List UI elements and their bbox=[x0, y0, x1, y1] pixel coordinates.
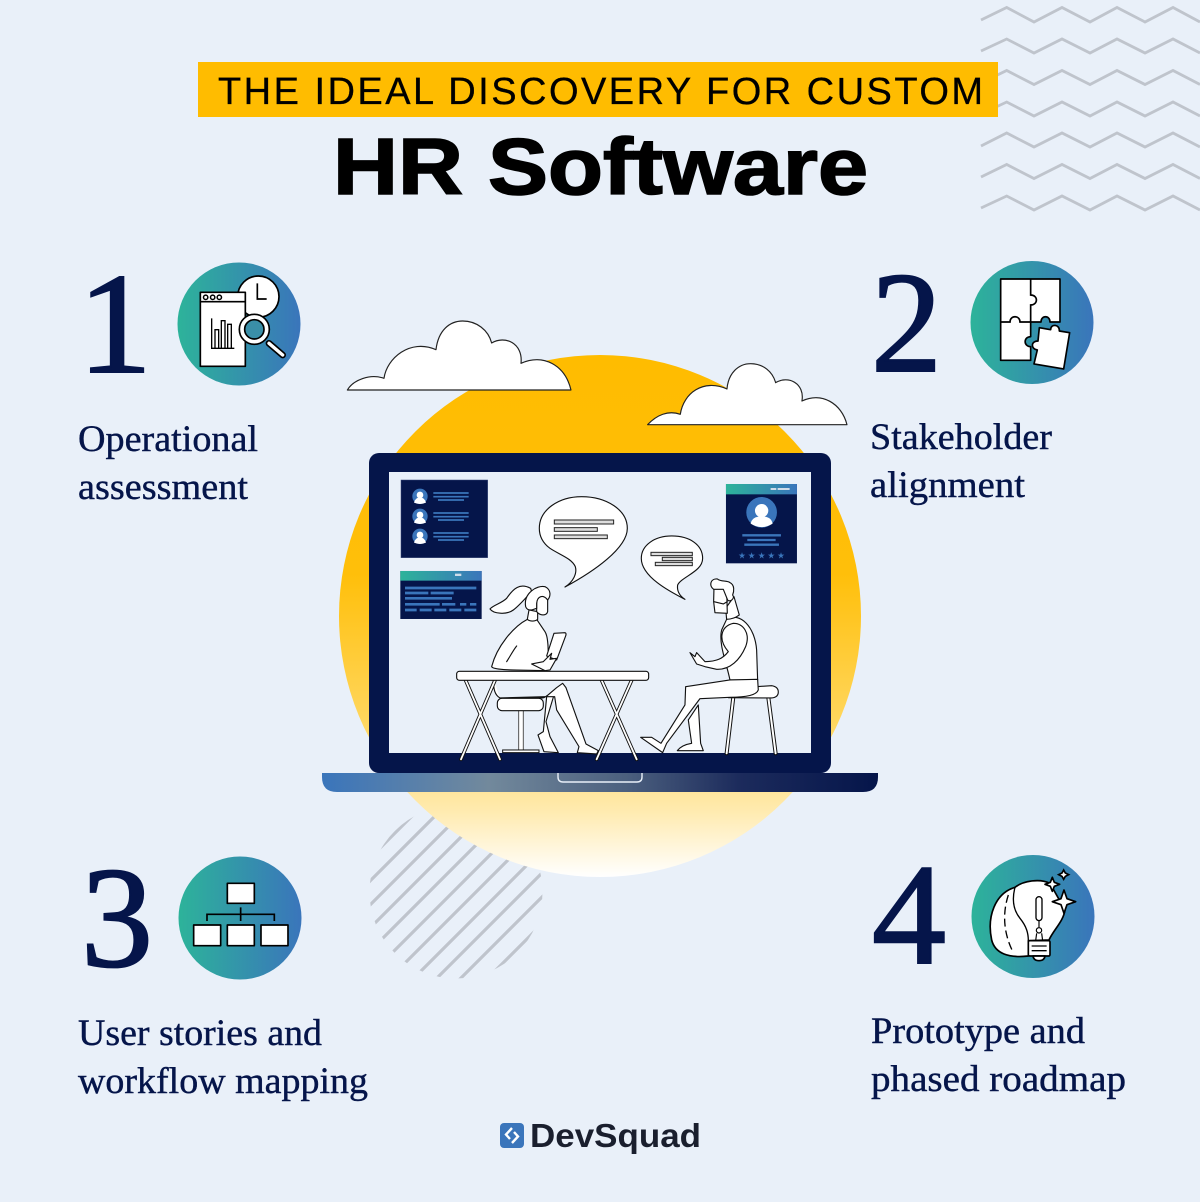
number 3: 3 bbox=[81, 839, 153, 998]
panel: profile card: ★ bbox=[738, 552, 746, 562]
yellow sun circle bbox=[339, 355, 861, 877]
number 2: 2 bbox=[871, 244, 942, 403]
number 1: 1 bbox=[78, 245, 152, 404]
label: Operational bbox=[78, 419, 258, 460]
panel: profile card: ★ bbox=[758, 552, 766, 562]
panel: profile card: ★ bbox=[748, 552, 756, 562]
figure: man bbox=[641, 579, 758, 753]
DevSquad logo bbox=[500, 1117, 701, 1154]
laptop bbox=[322, 453, 878, 792]
label bbox=[871, 1011, 1126, 1100]
icon: report and magnifier bbox=[178, 262, 300, 386]
icon: org chart bbox=[178, 856, 302, 980]
label: phased roadmap bbox=[871, 1059, 1126, 1100]
laptop base bbox=[322, 773, 878, 792]
hatched circle bbox=[370, 816, 542, 978]
step 2 bbox=[870, 244, 1094, 506]
panel: profile card bbox=[726, 484, 797, 563]
woman's stool bbox=[497, 698, 543, 753]
laptop screen bbox=[389, 472, 811, 753]
logo wordmark: DevSquad bbox=[530, 1117, 701, 1154]
label: Stakeholder bbox=[870, 417, 1052, 458]
main heading: HR Software bbox=[333, 122, 868, 211]
decorative zigzag pattern bbox=[981, 8, 1200, 210]
label bbox=[78, 419, 258, 508]
clouds bbox=[347, 321, 847, 425]
panel: user list bbox=[401, 480, 488, 558]
label bbox=[78, 1013, 368, 1102]
man's stool bbox=[727, 686, 778, 753]
screen illustration bbox=[400, 480, 797, 759]
figure: woman bbox=[490, 586, 598, 754]
label: workflow mapping bbox=[78, 1061, 368, 1102]
label: assessment bbox=[78, 467, 249, 508]
panel: text window bbox=[400, 571, 482, 619]
panel: profile card: ★ bbox=[767, 552, 775, 562]
step 1 bbox=[78, 245, 300, 508]
table bbox=[457, 671, 649, 759]
title banner: THE IDEAL DISCOVERY FOR CUSTOM bbox=[218, 71, 983, 113]
label: alignment bbox=[870, 465, 1026, 506]
panel: profile card: ★ bbox=[777, 552, 785, 562]
label: User stories and bbox=[78, 1013, 323, 1054]
label: Prototype and bbox=[871, 1011, 1086, 1052]
number 4: 4 bbox=[872, 836, 946, 995]
step 4 bbox=[871, 836, 1126, 1100]
laptop screen frame bbox=[369, 453, 831, 773]
icon: light bulb idea bbox=[972, 855, 1094, 978]
label bbox=[870, 417, 1052, 506]
step 3 bbox=[78, 839, 368, 1102]
icon: puzzle bbox=[970, 261, 1094, 384]
logo mark bbox=[500, 1123, 524, 1148]
speech bubble: small bbox=[641, 536, 703, 599]
speech bubble: large bbox=[539, 497, 627, 587]
